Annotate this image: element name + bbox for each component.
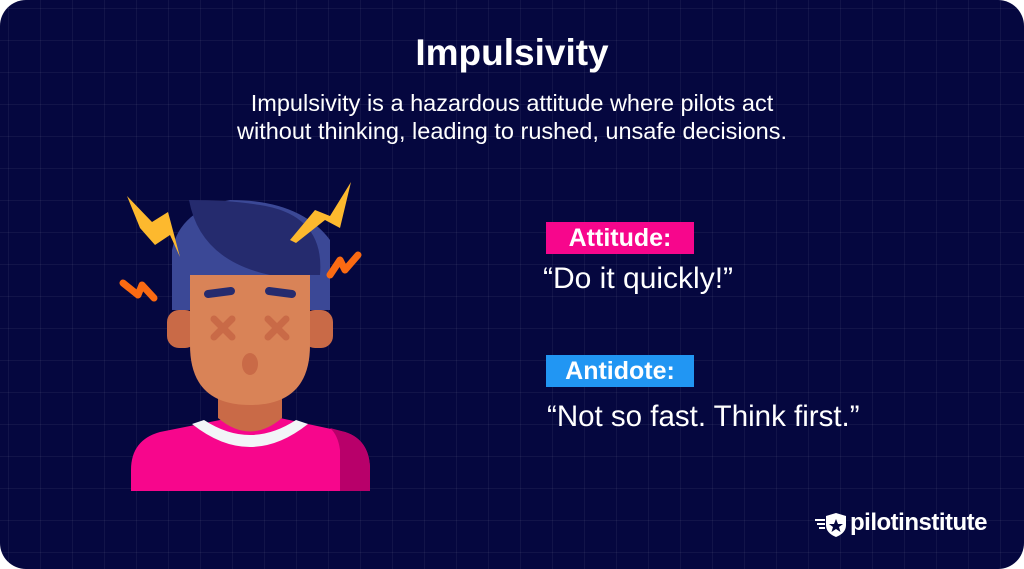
neck xyxy=(218,385,282,432)
attitude quote: “Do it quickly!” xyxy=(543,262,733,295)
antidote badge: Antidote: xyxy=(565,357,675,385)
hair xyxy=(172,200,330,310)
title: Impulsivity xyxy=(415,32,609,73)
logo: pilotinstitute xyxy=(850,509,987,536)
ears xyxy=(167,310,197,348)
antidote badge xyxy=(546,355,694,387)
subtitle xyxy=(237,90,787,144)
icon: lightning bolts xyxy=(127,182,351,257)
attitude badge xyxy=(546,222,694,254)
subtitle: without thinking, leading to rushed, unsafe decisions. xyxy=(237,118,787,144)
antidote quote: “Not so fast. Think first.” xyxy=(547,400,860,433)
face xyxy=(190,275,310,405)
illustration: stressed person xyxy=(120,182,370,491)
shirt xyxy=(131,418,370,491)
attitude badge: Attitude: xyxy=(569,224,671,252)
subtitle: Impulsivity is a hazardous attitude where pilots act xyxy=(251,90,773,116)
